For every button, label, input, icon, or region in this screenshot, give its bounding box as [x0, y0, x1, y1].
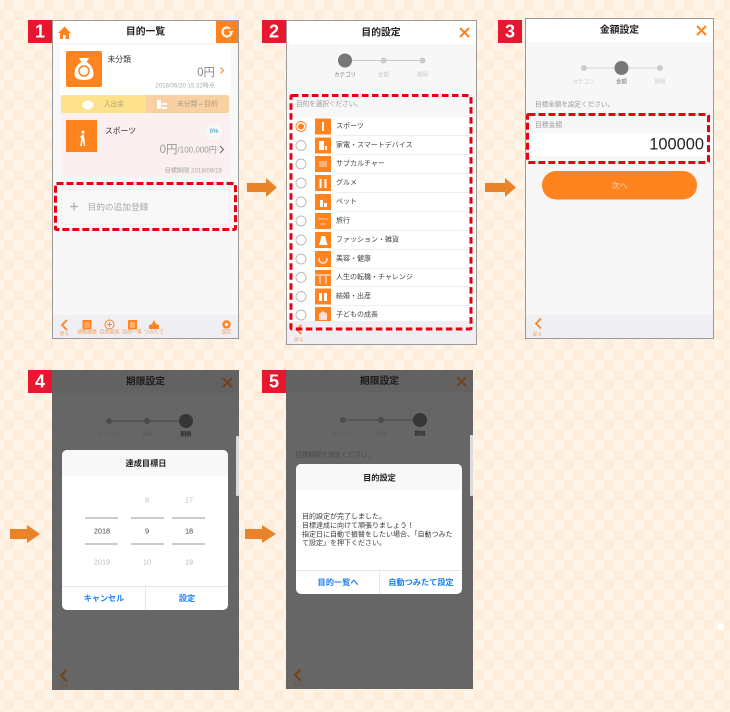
date picker dialog: 19: [185, 558, 193, 566]
card: sports goal: 0円/100,000円: [160, 144, 217, 156]
header: goal setting: 目的設定: [361, 26, 401, 38]
step 1 badge: 1: [35, 22, 45, 42]
progress steps: 期限: [654, 78, 666, 86]
completion dialog: 目的設定: [363, 472, 396, 482]
step 3 badge: [498, 20, 522, 43]
step 5 badge: 5: [269, 372, 279, 392]
action buttons: 未分類⇔目的: [177, 99, 218, 108]
action buttons: 入出金: [104, 99, 124, 108]
card: sports goal: スポーツ: [105, 126, 136, 136]
arrow: step 1 to 2: [247, 178, 277, 197]
date picker dialog: 設定: [179, 594, 195, 603]
header: deadline setting: 期限設定: [126, 374, 165, 388]
option: travel: [296, 213, 350, 229]
progress steps: 期限: [414, 430, 426, 438]
bottom navigation: 通帳履歴: [77, 328, 97, 336]
option: fashion: [296, 232, 399, 248]
arrow: step 2 to 3: [485, 178, 516, 197]
option: wedding: [296, 288, 371, 304]
card: unallocated: 0円: [197, 67, 215, 79]
highlight: add goal: [56, 184, 236, 230]
panel: step 3 amount setting: [526, 18, 714, 338]
progress steps: 金額: [375, 430, 387, 438]
bottom bar with back button: 戻る: [294, 337, 304, 343]
panel: step 5 completion dialog: [286, 370, 473, 689]
bottom navigation: つみたて: [144, 330, 164, 336]
card: unallocated: 2018/06/20 15:32時点: [155, 82, 215, 90]
option: electronics: 家電・スマートデバイス: [336, 140, 413, 149]
completion dialog: 自動つみたて設定: [388, 577, 454, 587]
completion dialog: 目的一覧へ: [318, 577, 358, 587]
progress steps: カテゴリ: [572, 78, 595, 86]
option: fashion: ファッション・雑貨: [336, 234, 399, 244]
add goal row: 目的の追加登録: [88, 201, 149, 212]
card: unallocated: [60, 45, 231, 95]
header: goal list: [53, 21, 238, 43]
category list: [287, 117, 476, 321]
date picker dialog: キャンセル: [84, 594, 124, 603]
bottom navigation: [53, 315, 238, 338]
date picker dialog: 2019: [94, 558, 110, 566]
amount field: 目標金額: [535, 120, 562, 129]
option: pets: [296, 194, 357, 210]
next button: 次へ: [612, 180, 628, 190]
bottom navigation: 設定: [221, 328, 232, 336]
prompt: 目標金額を設定ください。: [535, 100, 614, 108]
date picker dialog: 達成目標日: [126, 458, 166, 468]
panel: step 4 date picker: [52, 370, 239, 690]
header: deadline setting: [360, 374, 466, 387]
step 5 badge: [262, 370, 286, 393]
amount field: 100000: [649, 136, 704, 154]
option: children: 子どもの成長: [336, 310, 378, 318]
header: goal list: 目的一覧: [126, 24, 165, 38]
card: unallocated: 未分類: [108, 54, 131, 64]
step 2 badge: 2: [269, 22, 279, 42]
arrow: step 4 to 5: [245, 525, 276, 543]
step 4 badge: 4: [35, 372, 45, 392]
option: pets: ペット: [336, 198, 357, 206]
progress steps: [334, 54, 428, 78]
option: subculture: サブカルチャー: [336, 158, 385, 168]
add goal row: [62, 190, 230, 224]
option: gourmet: グルメ: [336, 178, 357, 186]
progress steps: カテゴリ: [334, 70, 356, 78]
bottom navigation: 目的一覧: [122, 328, 142, 336]
panel: step 2 category selection: [286, 20, 476, 344]
option: sports: スポーツ: [336, 122, 364, 130]
progress steps: 期限: [180, 430, 192, 438]
option: life change: 人生の転機・チャレンジ: [336, 272, 413, 281]
completion dialog: 指定日に自動で振替をしたい場合、「自動つみた: [302, 530, 452, 538]
progress steps: 金額: [378, 70, 389, 78]
highlight: category list: [291, 96, 471, 329]
option: sports: [296, 118, 364, 134]
date picker dialog: 17: [185, 496, 193, 504]
progress steps: 期限: [417, 70, 428, 78]
prompt: 目的を選択ください。: [296, 99, 362, 108]
completion dialog: 目標達成に向けて頑張りましょう！: [302, 520, 414, 530]
completion dialog: て設定」を押下ください。: [302, 538, 386, 547]
completion dialog: 目的設定が完了しました。: [302, 512, 386, 520]
progress steps: [332, 413, 427, 438]
step 1 badge: [28, 20, 52, 43]
panel: step 1 goal list screen: [52, 20, 238, 338]
step 3 badge: 3: [505, 22, 515, 42]
option: electronics: [296, 138, 413, 154]
date picker dialog: 2018: [94, 526, 110, 536]
option: beauty: [296, 251, 371, 267]
back button: 戻る: [59, 682, 69, 688]
bottom bar with back button: 戻る: [533, 332, 542, 338]
date picker dialog: 9: [145, 526, 149, 536]
amount field: [526, 120, 713, 156]
step 4 badge: [28, 370, 52, 393]
option: beauty: 美容・健康: [336, 254, 371, 262]
arrow: step 3 to 4: [10, 525, 40, 543]
bottom navigation: 目的追加: [99, 328, 120, 336]
action buttons: [61, 95, 229, 113]
progress steps: [572, 61, 666, 86]
header: amount setting: 金額設定: [600, 23, 639, 36]
date picker dialog: 10: [143, 558, 151, 566]
back button: 戻る: [293, 682, 303, 688]
option: life change: [296, 270, 413, 286]
card: sports goal: 目標期限 2018/09/19: [165, 166, 223, 174]
highlight: amount: [528, 114, 708, 162]
header: deadline setting: 期限設定: [360, 374, 399, 387]
option: travel: 旅行: [336, 216, 350, 224]
step 2 badge: [262, 20, 286, 43]
option: subculture: [296, 156, 385, 172]
date picker dialog: 18: [185, 526, 193, 536]
progress steps: カテゴリ: [332, 430, 354, 438]
progress steps: カテゴリ: [98, 430, 120, 438]
header: amount setting: [526, 19, 713, 42]
option: wedding: 結婚・出産: [336, 291, 371, 300]
date picker dialog: 8: [145, 496, 149, 504]
progress steps: 金額: [616, 78, 627, 86]
bottom bar with back button: [287, 321, 476, 344]
completion dialog: [296, 464, 462, 594]
bottom bar with back button: [526, 315, 713, 338]
option: gourmet: [296, 175, 357, 191]
back button: [293, 670, 303, 688]
bottom navigation: 戻る: [60, 331, 69, 337]
option: children: [296, 307, 378, 321]
next button: [542, 171, 697, 200]
card: sports goal: [61, 113, 229, 177]
date picker dialog: [62, 450, 228, 610]
card: sports goal: 0%: [210, 129, 219, 135]
progress steps: [98, 414, 193, 438]
header: goal setting: [287, 21, 476, 44]
progress steps: 金額: [141, 430, 153, 438]
prompt: 目標期限を設定ください。: [295, 450, 374, 459]
header: deadline setting: [126, 374, 232, 388]
back button: [59, 670, 69, 688]
